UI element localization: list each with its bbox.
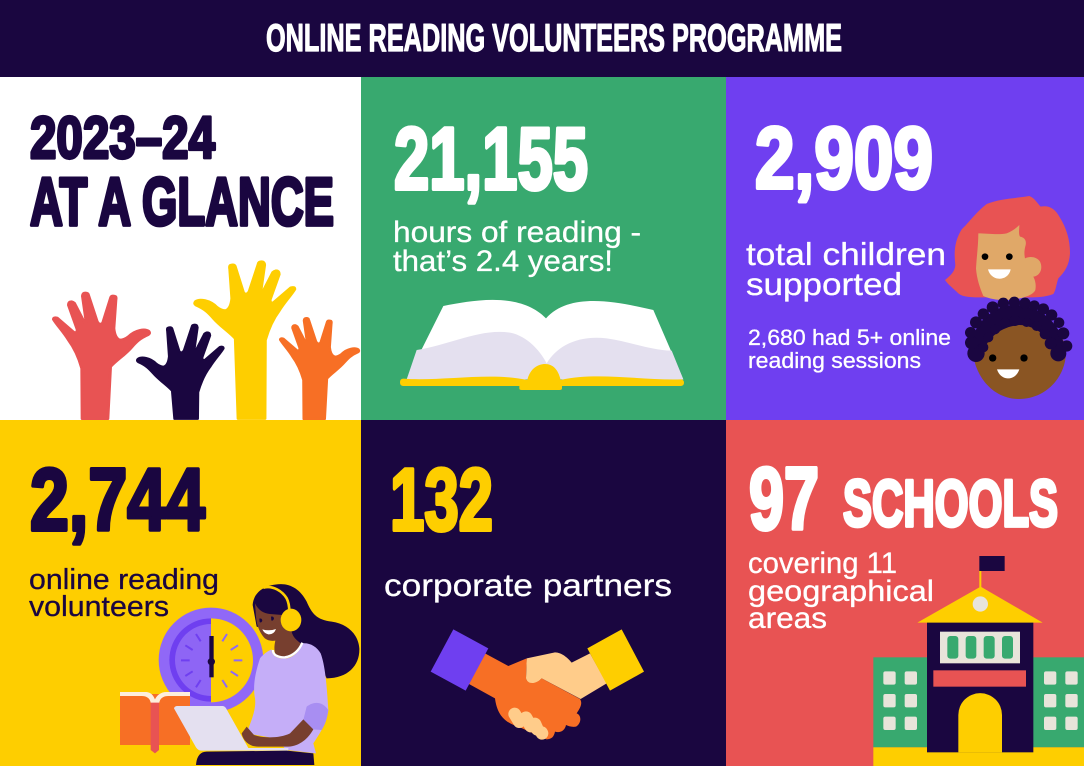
stat: 2,744: 2,744 [30,450,205,549]
icon: arm and hands [242,719,313,747]
panel: hours of reading [361,77,726,420]
text: areas: areas [748,602,827,635]
icon: shirt [247,643,328,753]
stat: 2,909: 2,909 [755,110,933,207]
panel: corporate partners [361,420,726,766]
text: sessions line two: reading sessions [748,348,921,373]
icon: purple cuff [431,629,488,691]
icon: face and neck [255,603,302,657]
text: sessions line one: 2,680 had 5+ online [748,325,951,350]
panel: children supported [726,77,1084,420]
panel: at a glance [0,77,361,420]
icon: yellow hand [195,262,295,418]
text: covering 11: covering 11 [748,547,897,580]
text: volunteers: volunteers [29,591,169,623]
stat: 21,155: 21,155 [394,109,588,208]
icon: smile [262,629,276,634]
icon: children faces [945,196,1072,399]
icon: fingers [515,714,542,733]
icon: red-haired child [945,196,1070,300]
heading: 2023-24: 2023–24 [30,105,215,171]
icon: navy hand [137,325,223,419]
icon: volunteer with laptop, clock and book [120,584,359,765]
icon: headphones [263,587,301,631]
icon: orange book [120,692,190,753]
icon: yellow cuff [587,629,644,691]
icon: raised hands [53,262,359,419]
icon: open book [400,300,684,390]
text: corporate partners: corporate partners [384,567,672,603]
text: total children: total children [746,236,946,272]
text: 2.4 years: that’s 2.4 years! [393,245,613,278]
icon: hair [253,584,359,678]
text: geographical: geographical [748,575,934,608]
panel: volunteers [0,420,361,766]
text: online reading: online reading [29,564,219,596]
heading: at a glance: AT A GLANCE [30,164,334,240]
icon: desk [196,751,314,765]
icon: red hand [53,293,150,419]
icon: handshake [431,629,644,739]
header bar [0,0,1084,77]
text: supported: supported [746,266,902,302]
panel: schools [726,420,1084,766]
icon: clock [159,608,263,712]
icon: school building [873,556,1084,766]
stat: 97: 97 [749,449,819,548]
icon: laptop [174,706,288,751]
icon: orange hand [280,318,359,419]
stat: 132: 132 [390,450,493,549]
text: hours of reading: hours of reading - [393,216,641,249]
icon: collar [273,643,302,657]
icon: curly-haired child [965,297,1072,399]
